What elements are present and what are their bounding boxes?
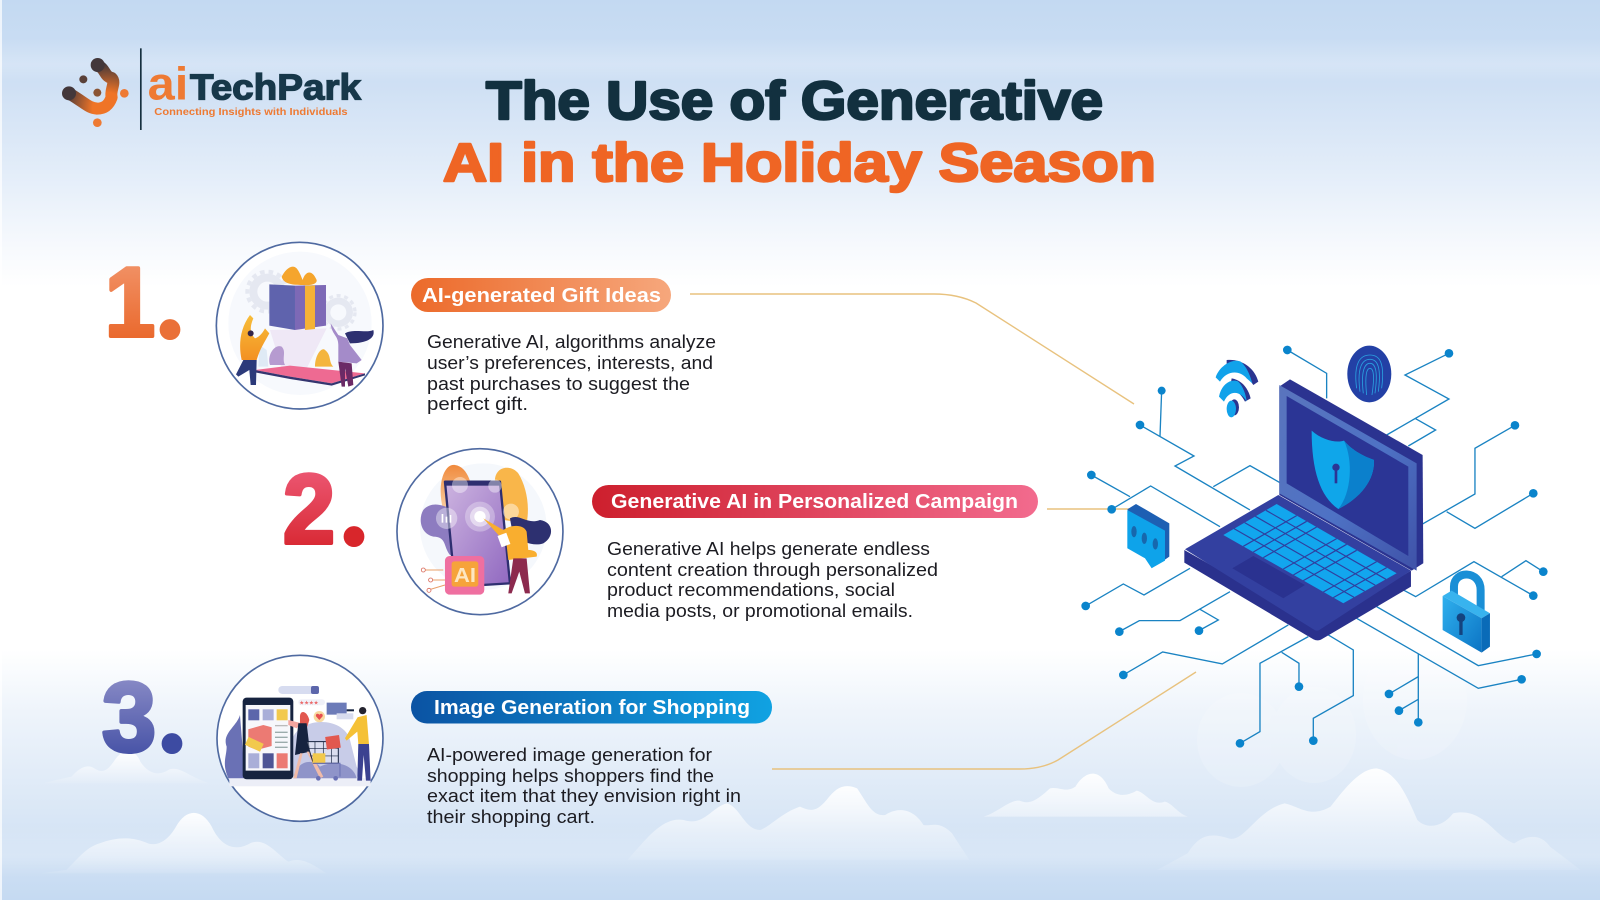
step 3 number: 3 xyxy=(102,662,156,772)
logo: aiTechPark xyxy=(62,48,362,130)
step 1 body text: Generative AI, algorithms analyze xyxy=(427,331,716,352)
step 1 body text: perfect gift. xyxy=(427,393,528,414)
heading pill 3 xyxy=(411,691,772,724)
icon: AI phone illustration circle xyxy=(397,449,563,615)
step 1 body text xyxy=(427,331,716,414)
logo wordmark: TechPark xyxy=(190,66,362,107)
step 2 number xyxy=(283,431,370,573)
step 3 body text: shopping helps shoppers find the xyxy=(427,765,714,786)
illustration: laptop with circuit xyxy=(1081,346,1548,748)
step 2 number: 2 xyxy=(283,454,335,564)
step 3 number: . xyxy=(156,638,188,780)
step 1 number xyxy=(105,224,186,366)
icon: wifi xyxy=(1216,360,1258,417)
icon: fingerprint xyxy=(1347,346,1391,402)
icon: logo molecule xyxy=(62,48,142,130)
step 2 body text: product recommendations, social xyxy=(607,579,895,600)
icon: gift illustration circle xyxy=(216,242,383,409)
step 3 body text: their shopping cart. xyxy=(427,806,595,827)
step 1 body text: past purchases to suggest the xyxy=(427,373,690,394)
icon: shopping illustration circle xyxy=(217,655,383,821)
step 3 number xyxy=(102,638,188,780)
heading pill 2 xyxy=(592,485,1038,518)
icon: shield xyxy=(1312,431,1374,509)
step 2 body text: Generative AI helps generate endless xyxy=(607,538,930,559)
connector lines xyxy=(690,294,1196,769)
heading pill 1: AI-generated Gift Ideas xyxy=(422,284,661,307)
logo wordmark: ai xyxy=(148,57,188,109)
icon: shopping illustration circle: ★★★★ xyxy=(299,699,319,706)
step 3 body text xyxy=(427,744,741,827)
title: The Use of Generative xyxy=(486,71,1103,131)
step 2 number: . xyxy=(338,431,370,573)
step 2 body text xyxy=(607,538,938,621)
step 1 number: . xyxy=(154,224,186,366)
decorative clouds xyxy=(41,751,1581,873)
logo wordmark: Connecting Insights with Individuals xyxy=(154,107,348,118)
step 3 body text: exact item that they envision right in xyxy=(427,785,741,806)
step 1 body text: user’s preferences, interests, and xyxy=(427,352,713,373)
step 2 body text: content creation through personalized xyxy=(607,559,938,580)
laptop xyxy=(1184,379,1423,640)
icon: chat bubble xyxy=(1127,504,1169,568)
circuit traces xyxy=(1081,346,1548,748)
heading pill 3: Image Generation for Shopping xyxy=(434,696,750,719)
faint circles behind circuit xyxy=(1197,640,1467,787)
icon: padlock xyxy=(1443,575,1490,653)
heading pill 2: Generative AI in Personalized Campaign xyxy=(611,490,1018,513)
title: AI in the Holiday Season xyxy=(443,133,1156,193)
step 3 body text: AI-powered image generation for xyxy=(427,744,712,765)
title xyxy=(443,71,1156,193)
step 1 number: 1 xyxy=(105,247,155,357)
heading pill 1 xyxy=(411,278,671,312)
step 2 body text: media posts, or promotional emails. xyxy=(607,600,913,621)
icon: AI phone illustration circle: AI xyxy=(454,564,476,587)
logo wordmark xyxy=(148,57,362,118)
